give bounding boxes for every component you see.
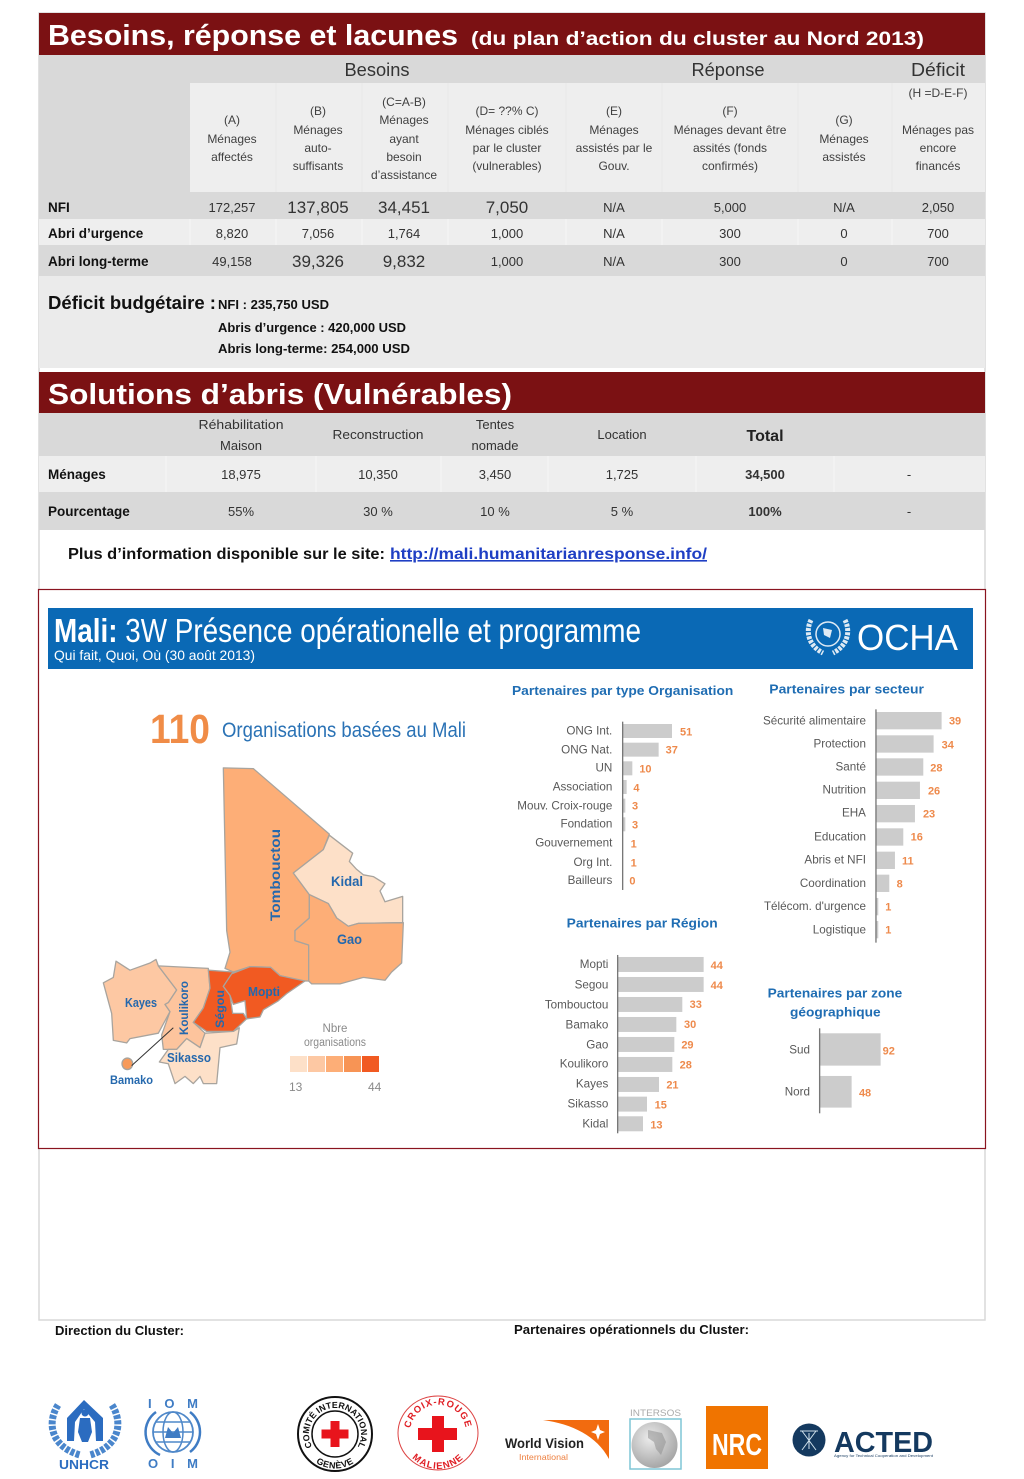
chart: partenaires par secteur: Télécom. d'urgence <box>764 900 866 913</box>
chart: partenaires par type d'organisation: Fondation <box>560 818 612 831</box>
table header: colonnes: affectés <box>211 150 253 164</box>
chart: partenaires par région: Bamako <box>566 1018 608 1031</box>
row: abri long-terme: N/A <box>603 254 625 269</box>
logo: UNHCR <box>52 1400 118 1472</box>
logo: World Vision: International <box>519 1452 568 1462</box>
chart: partenaires par secteur: 34 <box>942 739 955 751</box>
headline: 110 organisations: Organisations basées au Mali <box>222 719 466 742</box>
banner: OCHA <box>48 608 973 669</box>
row: pourcentage: 100% <box>748 504 782 519</box>
chart: partenaires par type d'organisation: Mouv. Croix-rouge <box>517 800 612 813</box>
table header: colonnes: Gouv. <box>598 159 630 173</box>
chart: partenaires par secteur: Education <box>814 831 866 844</box>
map: régions du Mali: Kayes <box>125 995 157 1010</box>
table header: groupes: Réponse <box>692 60 764 80</box>
chart: partenaires par région: 21 <box>666 1079 679 1091</box>
legend: nombre d'organisations <box>289 1023 382 1094</box>
heading: solutions d'abris <box>39 372 985 413</box>
chart: partenaires par secteur: 1 <box>885 902 891 914</box>
table header: colonnes: (A) <box>224 113 240 127</box>
row: abri d'urgence: 300 <box>719 226 741 241</box>
row: NFI: 7,050 <box>486 198 528 217</box>
chart: partenaires par zone géographique: géographique <box>790 1005 881 1020</box>
table header: colonnes: Ménages <box>819 132 869 146</box>
table header: colonnes: (D= ??% C) <box>475 104 539 118</box>
chart: partenaires par secteur: 23 <box>923 809 935 821</box>
heading: solutions d'abris: Solutions d’abris (Vulnérables) <box>48 379 512 411</box>
table header: nomade <box>472 438 518 453</box>
headline: 110 organisations <box>150 706 466 752</box>
chart: partenaires par type d'organisation: 37 <box>666 744 678 756</box>
row: abri d'urgence: 700 <box>927 226 949 241</box>
text: plus d'information: Plus d’information disponible sur le site: <box>68 546 385 563</box>
chart: partenaires par région <box>545 916 724 1133</box>
chart: partenaires par type d'organisation: 10 <box>639 763 652 775</box>
map: régions du Mali <box>103 768 403 1087</box>
table header: colonnes: assistés par le <box>576 141 653 155</box>
row: pourcentage <box>39 492 985 530</box>
row: abri d'urgence: N/A <box>603 226 625 241</box>
row: abri d'urgence: 7,056 <box>302 226 334 241</box>
map: régions du Mali: Kidal <box>331 873 363 889</box>
table header: colonnes: confirmés) <box>702 159 758 173</box>
map: régions du Mali: Sikasso <box>167 1050 211 1065</box>
chart: partenaires par secteur: Nutrition <box>823 784 866 797</box>
row: ménages: - <box>907 467 911 482</box>
logo: Croix-Rouge malienne <box>398 1396 478 1470</box>
row: ménages <box>39 456 985 492</box>
legend: nombre d'organisations: 13 <box>289 1080 303 1094</box>
chart: partenaires par type d'organisation: 51 <box>680 726 692 738</box>
table header <box>39 413 985 456</box>
chart: partenaires par zone géographique: Sud <box>789 1043 810 1056</box>
chart: partenaires par type d'organisation: 0 <box>629 876 635 888</box>
chart: partenaires par type d'organisation: Association <box>553 781 612 794</box>
row: abri d'urgence: 0 <box>840 226 848 241</box>
chart: partenaires par secteur: Partenaires par secteur <box>769 681 924 696</box>
chart: partenaires par région: Partenaires par Région <box>567 916 718 931</box>
chart: partenaires par zone géographique: Nord <box>785 1085 810 1098</box>
chart: partenaires par secteur <box>763 681 961 943</box>
chart: partenaires par type d'organisation: 4 <box>633 782 640 794</box>
chart: partenaires par secteur: Logistique <box>813 923 866 936</box>
headline: 110 organisations: 110 <box>150 706 210 752</box>
chart: partenaires par région: Segou <box>575 978 608 991</box>
table header: colonnes: encore <box>920 141 957 155</box>
chart: partenaires par région: 15 <box>655 1099 667 1111</box>
row: abri d'urgence: 8,820 <box>216 226 248 241</box>
logo: Croix-Rouge malienne: CROIX-ROUGE <box>404 1398 472 1428</box>
chart: partenaires par région: Sikasso <box>567 1097 608 1110</box>
chart: partenaires par secteur: Santé <box>835 761 866 774</box>
text: partenaires opérationnels: Partenaires opérationnels du Cluster: <box>514 1323 749 1337</box>
heading: besoins, réponse et lacunes: Besoins, réponse et lacunes <box>48 20 458 52</box>
chart: partenaires par secteur: 26 <box>928 785 940 797</box>
row: NFI: N/A <box>833 200 855 215</box>
row: pourcentage: 30 % <box>363 504 393 519</box>
row: abri long-terme: Abri long-terme <box>48 254 149 269</box>
chart: partenaires par type d'organisation: 1 <box>631 858 637 870</box>
row: abri long-terme: 700 <box>927 254 949 269</box>
chart: partenaires par région: Koulikoro <box>560 1057 608 1070</box>
table header: colonnes: (F) <box>722 104 738 118</box>
map: régions du Mali: Ségou <box>213 990 227 1028</box>
table header: colonnes: financés <box>916 159 960 173</box>
chart: partenaires par région: Gao <box>586 1038 608 1051</box>
table header: colonnes: Ménages ciblés <box>465 123 549 137</box>
panel: 3W Mali <box>38 590 986 1148</box>
logo: CICR: COMITÉ INTERNATIONAL <box>302 1402 368 1448</box>
map: régions du Mali: Bamako <box>110 1073 153 1087</box>
row: pourcentage: Pourcentage <box>48 504 130 519</box>
table header: colonnes: Ménages <box>207 132 257 146</box>
text: déficit budgétaire: NFI : 235,750 USD <box>218 297 329 312</box>
legend: nombre d'organisations: Nbre <box>323 1023 347 1035</box>
banner: OCHA: Mali: 3W Présence opérationelle et programme <box>54 612 641 649</box>
table header: colonnes: assités (fonds <box>693 141 767 155</box>
chart: partenaires par région: Mopti <box>580 958 608 971</box>
chart: partenaires par secteur: 8 <box>897 879 903 891</box>
map: régions du Mali: Koulikoro <box>177 981 191 1035</box>
table header: colonnes: Ménages <box>589 123 639 137</box>
table header: colonnes: (H =D-E-F) <box>908 86 968 100</box>
table header: colonnes: Ménages <box>379 113 429 127</box>
row: ménages: 34,500 <box>745 467 785 482</box>
charts: partenaires <box>512 681 961 1133</box>
table header: Reconstruction <box>332 427 424 442</box>
logo: World Vision: World Vision <box>505 1436 584 1451</box>
map: régions du Mali: Tombouctou <box>267 829 283 921</box>
text: plus d'information: http://mali.humanitarianresponse.info/ <box>390 546 708 563</box>
chart: partenaires par secteur: 11 <box>902 856 914 868</box>
row: NFI <box>39 192 985 219</box>
row: abri long-terme: 300 <box>719 254 741 269</box>
chart: partenaires par secteur: 28 <box>930 762 943 774</box>
row: NFI: 137,805 <box>287 198 349 217</box>
chart: partenaires par région: 28 <box>680 1059 692 1071</box>
chart: partenaires par zone géographique: 48 <box>859 1087 871 1099</box>
chart: partenaires par type d'organisation: Partenaires par type Organisation <box>512 683 733 698</box>
heading: besoins, réponse et lacunes <box>39 13 985 55</box>
chart: partenaires par région: 30 <box>684 1019 696 1031</box>
chart: partenaires par type d'organisation: Bailleurs <box>568 874 612 887</box>
chart: partenaires par secteur: 1 <box>885 925 891 937</box>
chart: partenaires par type d'organisation: Org Int. <box>573 856 612 869</box>
row: abri d'urgence <box>39 219 985 245</box>
table header: Location <box>597 427 647 442</box>
table header: colonnes <box>190 83 985 192</box>
row: abri d'urgence: Abri d’urgence <box>48 226 144 241</box>
table header: colonnes: assistés <box>822 150 866 164</box>
table header: colonnes: par le cluster <box>473 141 541 155</box>
heading: besoins, réponse et lacunes: (du plan d’action du cluster au Nord 2013) <box>471 29 924 50</box>
chart: partenaires par région: 44 <box>711 960 724 972</box>
table header: Réhabilitation <box>198 417 284 432</box>
logo: UNHCR: UNHCR <box>59 1458 109 1472</box>
chart: partenaires par région: Kidal <box>582 1117 608 1130</box>
logo: ACTED <box>792 1424 933 1459</box>
logo: CICR: GENÈVE <box>317 1458 354 1469</box>
logo: IOM OIM: I O M <box>148 1396 198 1411</box>
chart: partenaires par région: 13 <box>650 1119 663 1131</box>
row: abri long-terme: 39,326 <box>292 252 344 271</box>
banner: OCHA: Qui fait, Quoi, Où (30 août 2013) <box>54 647 255 663</box>
row: NFI: 2,050 <box>922 200 954 215</box>
chart: partenaires par type d'organisation: ONG Nat. <box>561 743 612 756</box>
row: pourcentage: - <box>907 504 911 519</box>
chart: partenaires par zone géographique: Partenaires par zone <box>768 985 902 1000</box>
logo: IOM OIM <box>146 1396 200 1471</box>
row: pourcentage: 55% <box>228 504 254 519</box>
logo: Intersos <box>630 1408 681 1469</box>
chart: partenaires par région: 44 <box>711 980 724 992</box>
table header: groupes <box>39 55 985 192</box>
chart: partenaires par type d'organisation: 3 <box>632 819 638 831</box>
row: NFI: N/A <box>603 200 625 215</box>
text: déficit budgétaire: Abris d’urgence : 420,000 USD <box>218 320 406 335</box>
table header: Tentes <box>476 417 515 432</box>
chart: partenaires par type d'organisation: 1 <box>631 838 637 850</box>
text: déficit budgétaire: Abris long-terme: 254,000 USD <box>218 341 410 356</box>
row: abri long-terme: 0 <box>840 254 848 269</box>
chart: partenaires par secteur: 39 <box>949 715 961 727</box>
row: ménages: Ménages <box>48 467 106 482</box>
row: abri d'urgence: 1,000 <box>491 226 523 241</box>
chart: partenaires par type d'organisation: UN <box>595 762 612 775</box>
chart: partenaires par secteur: Sécurité alimentaire <box>763 714 866 727</box>
chart: partenaires par région: Tombouctou <box>545 998 608 1011</box>
row: pourcentage: 5 % <box>611 504 634 519</box>
logo: Croix-Rouge malienne: MALIENNE <box>412 1454 463 1470</box>
table header: Total <box>746 428 784 445</box>
row: abri long-terme: 1,000 <box>491 254 523 269</box>
row: NFI: 172,257 <box>208 200 256 215</box>
chart: partenaires par zone géographique: 92 <box>883 1045 895 1057</box>
chart: partenaires par secteur: Protection <box>813 738 866 751</box>
logo: World Vision <box>505 1420 609 1462</box>
chart: partenaires par secteur: Coordination <box>800 877 866 890</box>
text: direction du cluster: Direction du Cluster: <box>55 1324 184 1338</box>
chart: partenaires par zone géographique <box>768 985 902 1113</box>
banner: OCHA: OCHA <box>857 617 958 658</box>
logo: ACTED: Agency for Technical Cooperation and Development <box>834 1454 933 1458</box>
chart: partenaires par secteur: EHA <box>842 807 866 820</box>
logo: CICR <box>297 1396 373 1472</box>
row: abri d'urgence: 1,764 <box>388 226 420 241</box>
text: déficit budgétaire <box>48 293 410 356</box>
table header: colonnes: suffisants <box>293 159 343 173</box>
row: NFI: NFI <box>48 200 70 215</box>
logo: NRC <box>706 1406 768 1469</box>
table header: colonnes: (vulnerables) <box>472 159 542 173</box>
chart: partenaires par secteur: Abris et NFI <box>804 854 866 867</box>
map: régions du Mali: Mopti <box>248 984 280 999</box>
table header: colonnes: (B) <box>310 104 326 118</box>
legend: nombre d'organisations: organisations <box>304 1037 366 1049</box>
row: NFI: 34,451 <box>378 198 430 217</box>
table header: groupes: Déficit <box>911 60 965 80</box>
table header: colonnes: (E) <box>606 104 622 118</box>
logo: NRC: NRC <box>712 1427 762 1462</box>
panel: solutions d'abris <box>39 372 985 530</box>
chart: partenaires par région: 29 <box>681 1039 694 1051</box>
row: pourcentage: 10 % <box>480 504 510 519</box>
chart: partenaires par type d'organisation: 3 <box>632 801 638 813</box>
chart: partenaires par secteur: 16 <box>911 832 923 844</box>
row: ménages: 10,350 <box>358 467 398 482</box>
panel: besoins, réponse et lacunes <box>39 13 985 368</box>
table header: colonnes: Ménages pas <box>902 123 974 137</box>
table header: Maison <box>220 438 262 453</box>
table header: colonnes: ayant <box>389 132 419 146</box>
table header: colonnes: Ménages devant être <box>674 123 787 137</box>
row: abri long-terme: 49,158 <box>212 254 252 269</box>
row: ménages: 18,975 <box>221 467 261 482</box>
chart: partenaires par type d'organisation <box>512 683 733 890</box>
table header: colonnes: auto- <box>304 141 332 155</box>
map: régions du Mali: Gao <box>337 931 362 947</box>
row: NFI: 5,000 <box>714 200 746 215</box>
row: ménages: 1,725 <box>606 467 638 482</box>
chart: partenaires par région: 33 <box>690 999 702 1011</box>
legend: nombre d'organisations: 44 <box>368 1080 382 1094</box>
table header: colonnes: (C=A-B) <box>382 95 426 109</box>
logo: ACTED: ACTED <box>834 1427 933 1459</box>
table header: colonnes: besoin <box>386 150 422 164</box>
table header: colonnes: Ménages <box>293 123 343 137</box>
chart: partenaires par région: Kayes <box>576 1077 608 1090</box>
row: abri long-terme <box>39 245 985 276</box>
row: ménages: 3,450 <box>479 467 511 482</box>
logo: IOM OIM: O I M <box>148 1456 198 1471</box>
chart: partenaires par type d'organisation: ONG Int. <box>566 724 612 737</box>
table header: colonnes: (G) <box>835 113 853 127</box>
logo: Intersos: INTERSOS <box>630 1408 681 1419</box>
text: déficit budgétaire: Déficit budgétaire : <box>48 293 216 313</box>
row: abri long-terme: 9,832 <box>383 252 425 271</box>
table header: groupes: Besoins <box>344 60 410 80</box>
table header: colonnes: d’assistance <box>371 168 437 182</box>
icon: UN emblem <box>808 620 848 653</box>
text: plus d'information <box>68 546 708 563</box>
chart: partenaires par type d'organisation: Gouvernement <box>535 837 613 850</box>
